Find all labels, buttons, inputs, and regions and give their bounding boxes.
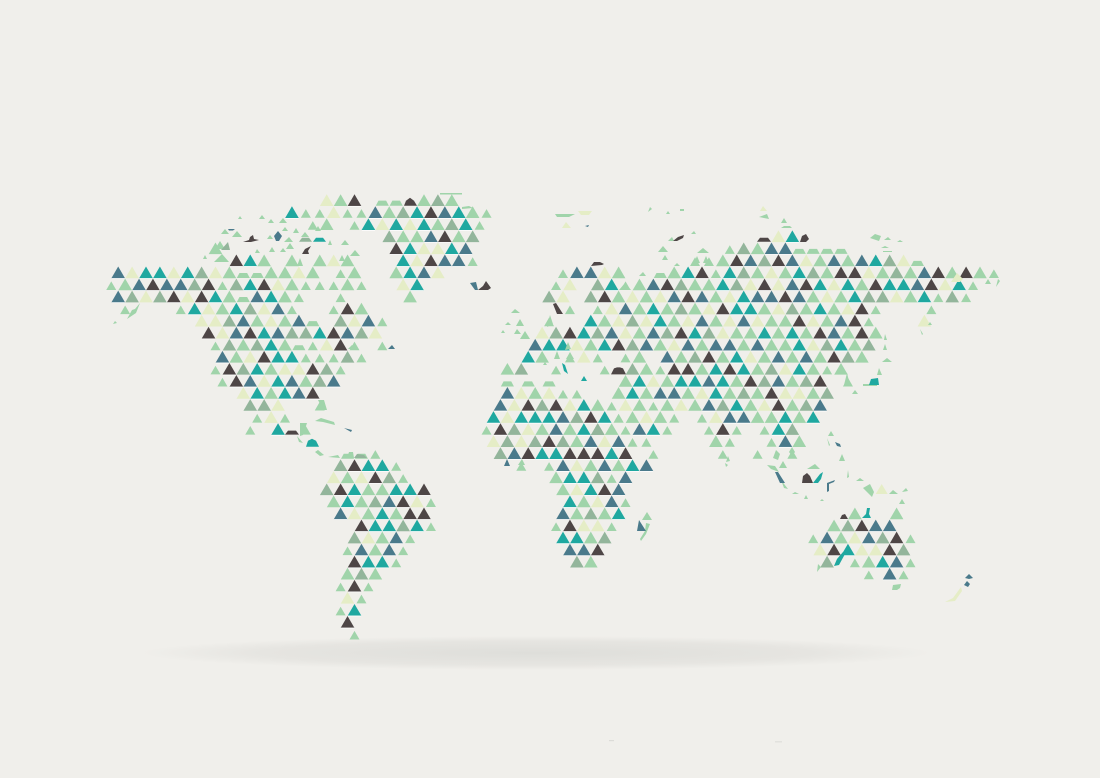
europe and asia (501, 206, 1000, 459)
north america (111, 206, 395, 447)
south east asia islands (725, 431, 908, 504)
greenland and iceland (368, 193, 491, 302)
ground shadow (141, 636, 931, 670)
south america (315, 450, 431, 640)
australia and new zealand (813, 508, 973, 602)
africa (487, 398, 653, 567)
